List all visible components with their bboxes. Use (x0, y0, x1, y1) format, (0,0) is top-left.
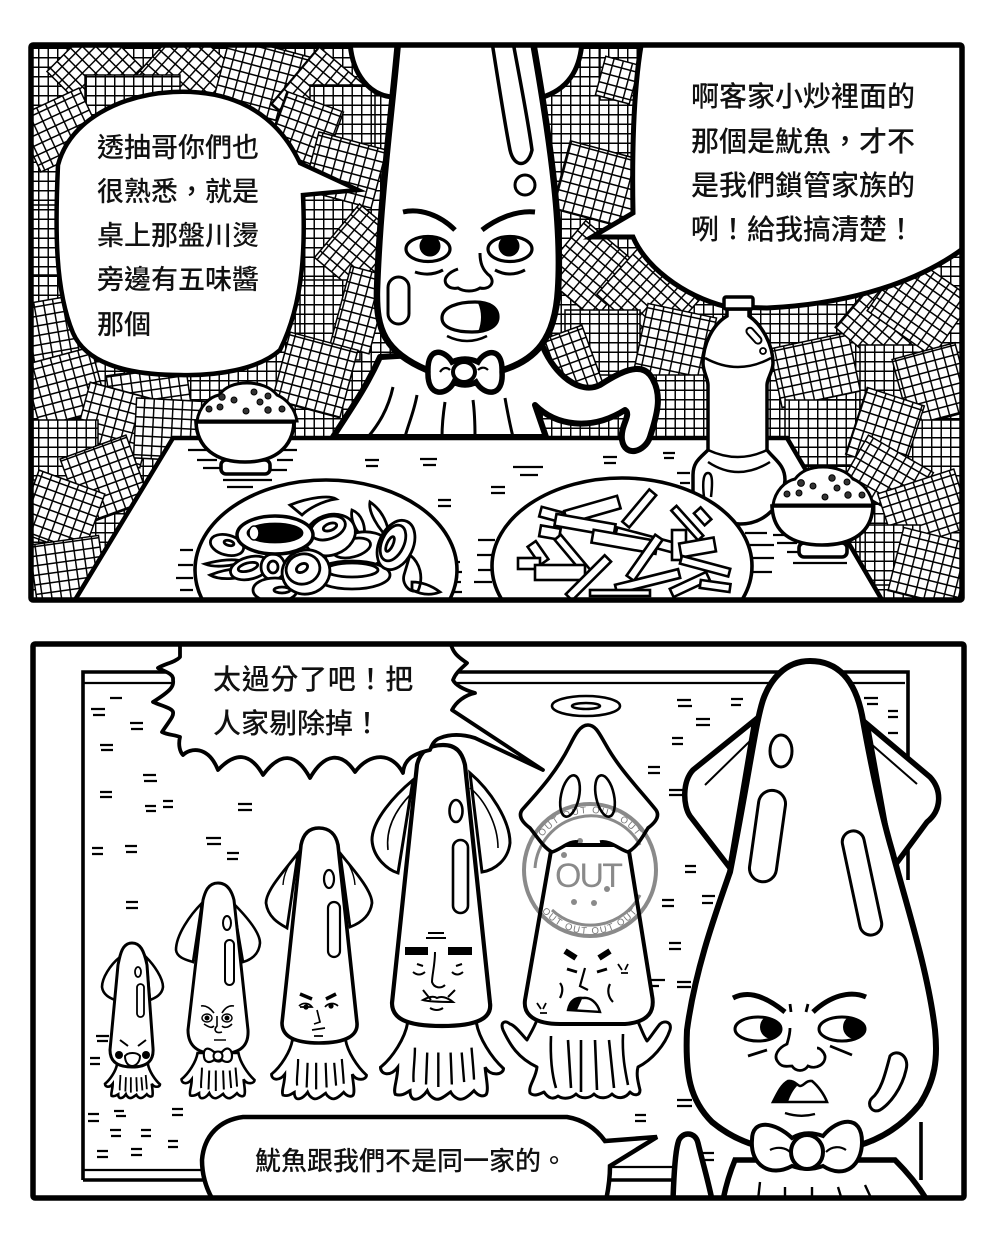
bow tie (752, 1122, 862, 1171)
OUT stamp (522, 802, 658, 938)
halo (552, 696, 620, 716)
speech bubble right (592, 40, 968, 308)
soda bottle (693, 297, 785, 524)
tiny squid (102, 943, 163, 1098)
wall frame (83, 672, 921, 1180)
cloud speech bubble: 太過分了吧！把 (213, 664, 414, 695)
speech bubble right: 咧！給我搞清楚！ (691, 214, 915, 245)
arm (673, 1134, 712, 1200)
speech bubble bottom: 魷魚跟我們不是同一家的。 (255, 1146, 567, 1176)
plate: stir-fried strips (490, 476, 754, 598)
big squid foreground (673, 661, 939, 1200)
table (75, 438, 882, 600)
body (687, 661, 936, 1152)
fins (685, 720, 939, 868)
speech bubble bottom (202, 1117, 657, 1205)
face (733, 994, 866, 1012)
face (403, 211, 535, 230)
body (377, 42, 559, 370)
panel: top dinner table scene (34, 48, 960, 598)
rice bowl right (772, 467, 873, 557)
cloud speech bubble: 人家剔除掉！ (213, 708, 381, 739)
tentacles (380, 1023, 504, 1099)
speech bubble left: 那個 (97, 310, 151, 340)
soy sauce dish (237, 516, 313, 554)
tentacle skirt and arm (333, 347, 658, 451)
medium squid (266, 828, 372, 1099)
cloud speech bubble (153, 640, 543, 778)
speech bubble left: 透抽哥你們也 (97, 133, 259, 163)
OUT stamp: OUT OUT OUT OUT (543, 908, 636, 934)
tentacles (105, 1064, 160, 1098)
OUT stamp: OUT (555, 857, 623, 895)
speech bubble left: 很熟悉，就是 (97, 177, 259, 207)
speech bubble left: 旁邊有五味醬 (97, 265, 259, 295)
small squid with bow tie (176, 883, 260, 1098)
tentacles and raised arms (502, 1020, 670, 1098)
bow tie (428, 352, 502, 392)
panel border: top (31, 45, 962, 600)
diamond squid with halo (502, 696, 670, 1098)
hatched background (16, 22, 973, 610)
speech bubble left (57, 92, 358, 375)
speech bubble left: 桌上那盤川燙 (97, 221, 259, 251)
wall texture dashes (88, 698, 898, 1160)
lower body (723, 1160, 927, 1200)
speech bubble right: 啊客家小炒裡面的 (691, 81, 915, 112)
squid character at table (333, 42, 658, 451)
fins (350, 42, 582, 98)
speech bubble right: 那個是魷魚，才不 (691, 126, 915, 157)
tentacles (272, 1040, 366, 1099)
tall squid (372, 745, 510, 1099)
panel: bottom squid family (81, 646, 942, 1196)
plate: sliced squid (193, 478, 459, 598)
panel border: bottom (33, 644, 964, 1198)
rice bowl left (196, 383, 297, 474)
tentacles (182, 1053, 254, 1098)
OUT stamp: OUT OUT OUT OUT (538, 806, 642, 836)
speech bubble right: 是我們鎖管家族的 (691, 170, 915, 201)
body highlights (492, 42, 532, 164)
